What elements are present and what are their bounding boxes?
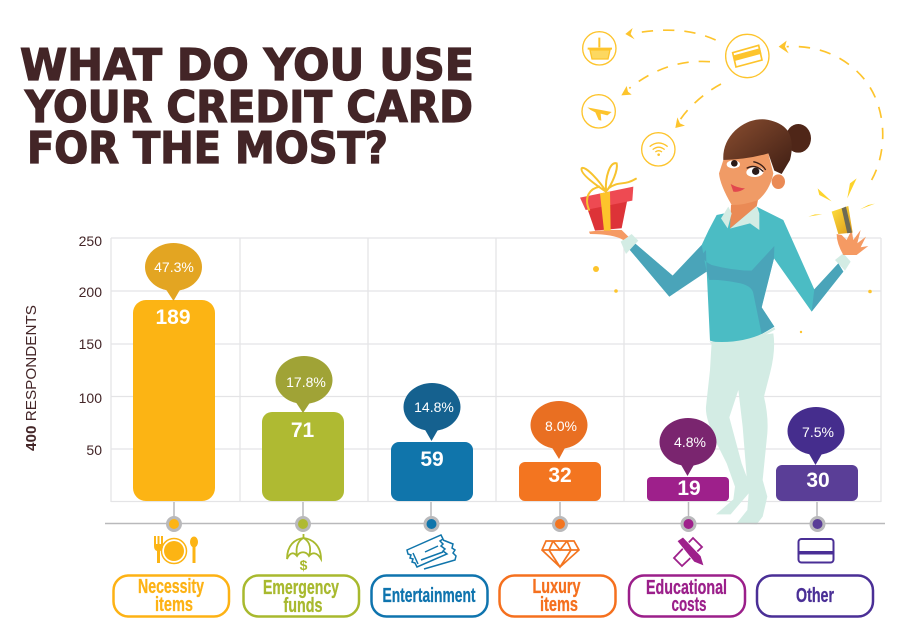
y-axis title: 400 RESPONDENTS <box>23 305 40 451</box>
sweater <box>629 207 843 345</box>
icon: wifi <box>642 133 675 166</box>
icon: generic card <box>798 539 834 562</box>
bar: other <box>776 407 858 501</box>
dashed arrows and purchase icons <box>582 28 883 180</box>
y-axis labels: 50 <box>86 442 102 458</box>
bubble: 14.8%: 14.8% <box>414 399 454 415</box>
confetti dots <box>593 266 872 333</box>
icon: tickets <box>407 535 456 569</box>
trousers and shoes <box>706 333 774 524</box>
category pill: other <box>757 576 873 616</box>
title: WHAT DO YOU USE <box>20 40 474 91</box>
icon: umbrella with dollar: $ <box>300 557 308 573</box>
y-axis labels: 200 <box>79 284 102 300</box>
chart grid <box>111 238 881 502</box>
bar: luxury items <box>519 401 601 501</box>
title: YOUR CREDIT CARD <box>24 82 473 133</box>
bubble: 47.3%: 47.3% <box>154 259 194 275</box>
icon: pencil and ruler <box>674 537 704 566</box>
gift box <box>580 163 637 231</box>
category pill: entertainment <box>372 576 488 616</box>
head, neck and collar <box>719 119 811 230</box>
category pill: educational costs: costs <box>672 594 706 616</box>
category pill: luxury items: items <box>540 594 578 616</box>
category pill: emergency funds: Emergency <box>263 577 340 599</box>
icon: airplane <box>582 95 615 128</box>
category pill: other: Other <box>796 585 834 607</box>
bar: educational costs <box>647 418 729 501</box>
category pill: luxury items <box>500 576 616 616</box>
icon: plate and cutlery <box>154 536 198 564</box>
bubble: 17.8%: 17.8% <box>286 374 326 390</box>
category pill: necessity items: items <box>155 594 193 616</box>
icon: basket <box>583 32 616 65</box>
title: FOR THE MOST? <box>27 123 388 174</box>
bubble: 47.3% <box>145 243 202 301</box>
y-axis labels: 150 <box>79 336 102 352</box>
category pill: necessity items <box>114 576 229 616</box>
bar: luxury items: 32 <box>548 464 572 487</box>
category pill: emergency funds: funds <box>284 595 322 617</box>
baseline axis with category markers <box>105 502 885 530</box>
bar: necessity items: 189 <box>155 306 191 329</box>
category pill: educational costs <box>629 576 745 616</box>
y-axis labels <box>79 233 102 458</box>
icon: diamond <box>542 541 579 567</box>
bubble: 17.8% <box>276 356 332 413</box>
category pill: necessity items: Necessity <box>138 576 205 598</box>
y-axis labels: 250 <box>79 233 102 249</box>
yellow credit card with sparkles <box>808 178 875 234</box>
icon: umbrella with dollar <box>287 534 321 573</box>
bar: emergency funds <box>262 356 344 501</box>
category pill: educational costs: Educational <box>646 577 727 599</box>
bar: educational costs: 19 <box>677 477 701 500</box>
category pill: luxury items: Luxury <box>532 576 581 598</box>
bubble: 4.8%: 4.8% <box>674 434 706 450</box>
bar: other: 30 <box>806 469 830 492</box>
arm cuffs and hands <box>589 230 868 271</box>
bar: necessity items <box>133 243 215 501</box>
bar: entertainment: 59 <box>420 448 444 471</box>
dashed arrows <box>621 28 883 180</box>
category pill: emergency funds <box>244 576 359 617</box>
icon: credit card <box>726 34 769 78</box>
category pill: entertainment: Entertainment <box>382 585 476 607</box>
title <box>20 40 474 174</box>
bar: entertainment <box>391 383 473 501</box>
y-axis labels: 100 <box>79 390 102 406</box>
woman illustration <box>580 119 875 524</box>
bubble: 8.0%: 8.0% <box>545 418 577 434</box>
bar: emergency funds: 71 <box>291 419 314 442</box>
bubble: 7.5%: 7.5% <box>802 424 834 440</box>
